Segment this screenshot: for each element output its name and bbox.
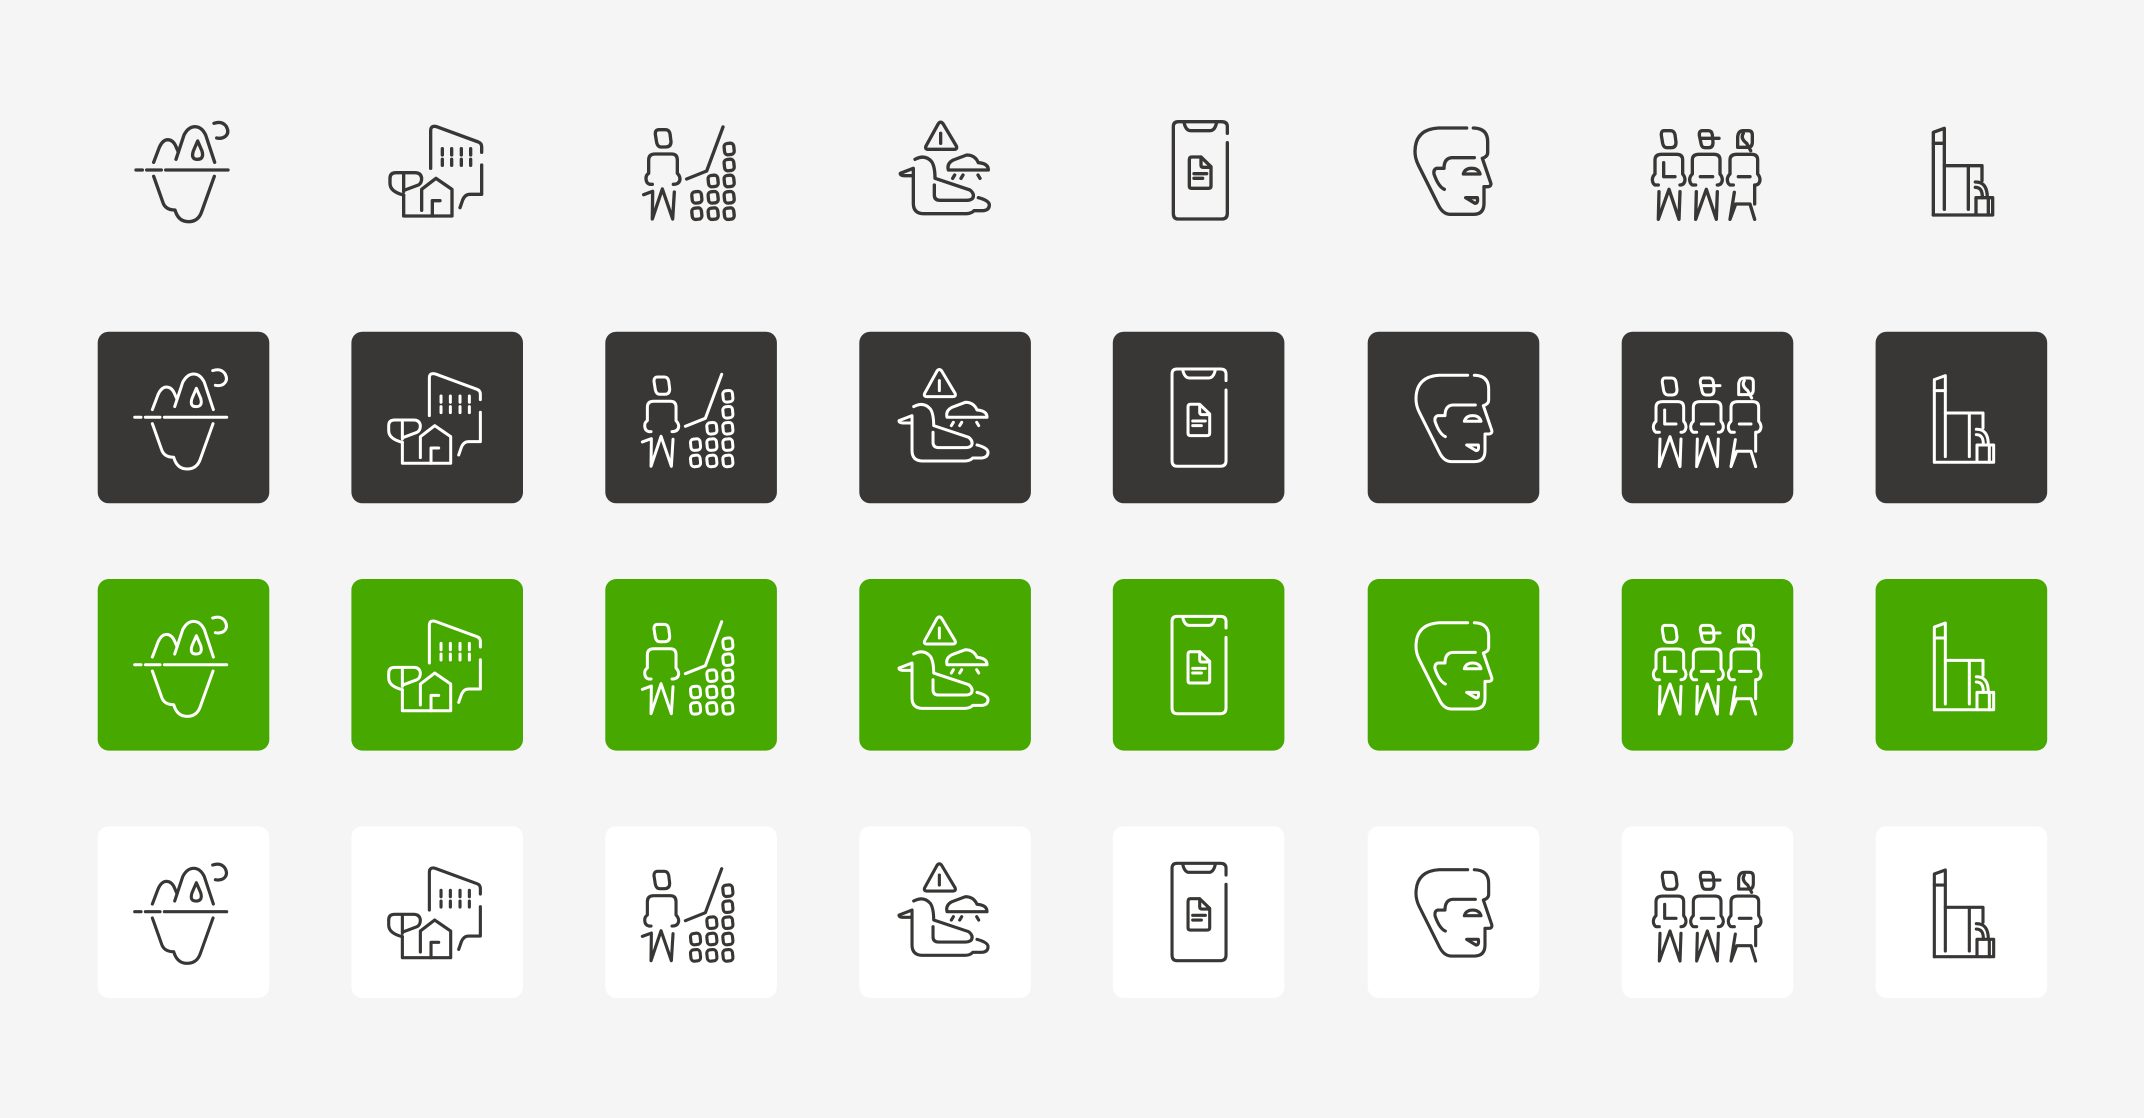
white tile: city buildings and house [351, 826, 523, 998]
icon: three people [1652, 131, 1760, 219]
row 2: dark tiles [98, 332, 2047, 503]
dark tile: duck with warning sign and cloud [859, 332, 1031, 503]
green tile: three people [1622, 579, 1793, 751]
dark tile: head in profile [1368, 332, 1539, 503]
icon: iceberg [136, 122, 228, 222]
icon: person with rising chart [644, 127, 735, 220]
row 1: icons on the plain background [136, 122, 1993, 222]
green tile: head in profile [1368, 579, 1539, 751]
dark tile: person with rising chart [605, 332, 777, 503]
icon: duck with warning sign and cloud [900, 122, 989, 214]
dark tile: iceberg [98, 332, 269, 503]
dark tile: smartphone with document [1113, 332, 1284, 503]
white tile: duck with warning sign and cloud [859, 826, 1031, 998]
white tile: head in profile [1368, 826, 1539, 998]
row 3: green tiles [98, 579, 2047, 751]
green tile: factory with padlock [1876, 579, 2047, 751]
white tile: smartphone with document [1113, 826, 1284, 998]
dark tile: city buildings and house [351, 332, 523, 503]
icon: head in profile [1415, 128, 1491, 214]
dark tile: three people [1622, 332, 1793, 503]
green tile: person with rising chart [605, 579, 777, 751]
green tile: city buildings and house [351, 579, 523, 751]
row 4: white tiles [98, 826, 2047, 998]
white tile: iceberg [98, 826, 269, 998]
icon: factory with padlock [1933, 128, 1993, 215]
white tile: person with rising chart [605, 826, 777, 998]
icon: city buildings and house [390, 126, 482, 216]
green tile: duck with warning sign and cloud [859, 579, 1031, 751]
green tile: smartphone with document [1113, 579, 1284, 751]
icon: smartphone with document [1173, 122, 1227, 219]
green tile: iceberg [98, 579, 269, 751]
white tile: three people [1622, 826, 1793, 998]
white tile: factory with padlock [1876, 826, 2047, 998]
dark tile: factory with padlock [1876, 332, 2047, 503]
